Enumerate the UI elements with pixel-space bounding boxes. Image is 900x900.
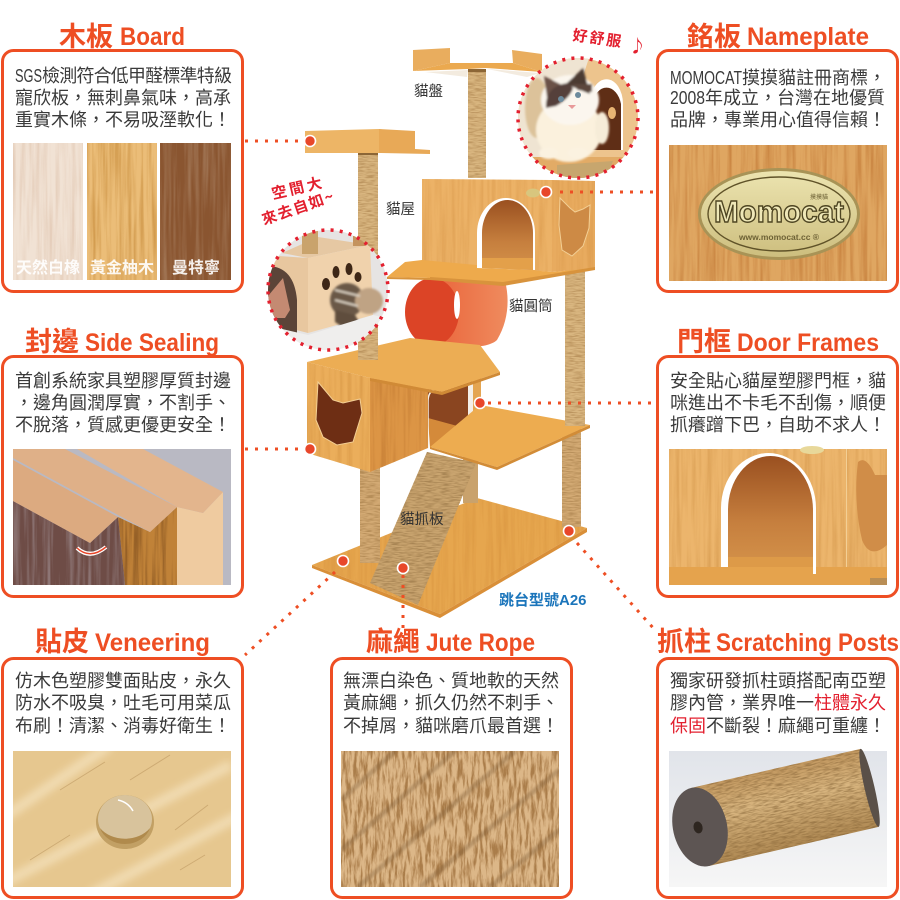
heading: 抓柱: [657, 627, 711, 657]
heading: Door Frames: [737, 329, 879, 357]
note: plenty of space: 空間大: [269, 171, 327, 204]
description: 仿木色塑膠雙面貼皮，永久: [15, 671, 231, 691]
right post upper: [565, 266, 585, 426]
description: MOMOCAT: [670, 68, 742, 88]
description: 重實木條，不易吸溼軟化！: [15, 110, 231, 130]
description: 抓癢蹭下巴，自助不求人！: [670, 415, 886, 435]
water drop photo: [13, 751, 231, 887]
description: 保固不斷裂！麻繩可重纏！: [670, 716, 886, 736]
description: ，邊角圓潤厚實，不割手、: [15, 393, 231, 413]
description: 摸摸貓註冊商標，: [742, 68, 886, 88]
description: [670, 671, 886, 736]
dotted leader lines: [245, 141, 655, 655]
description: [343, 671, 559, 736]
description: 品牌，專業用心值得信賴！: [670, 110, 886, 130]
door arch: [477, 198, 535, 270]
lower left post: [360, 465, 380, 563]
marker dots: [304, 136, 574, 574]
heading: 封邊: [25, 327, 79, 357]
edge sealing photo: [13, 449, 231, 585]
back post: [463, 440, 478, 503]
heading: Veneering: [95, 629, 210, 657]
panel: jute rope: [332, 626, 572, 898]
right post overlap on shelf: [565, 405, 585, 426]
description: 獨家研發抓柱頭搭配南亞塑: [670, 671, 886, 691]
swatches: [13, 143, 231, 280]
heading: [25, 327, 219, 357]
heading: Side Sealing: [85, 329, 219, 357]
heading: [687, 22, 869, 52]
photo circle: cat with paw house: [265, 225, 395, 355]
note: comfortable: 好舒服: [571, 24, 625, 52]
description: SGS: [15, 66, 42, 86]
door photo: [669, 446, 887, 585]
part labels: [386, 83, 552, 528]
description: 年成立，台灣在地優質: [705, 88, 885, 108]
description: 不掉屑，貓咪磨爪最首選！: [343, 716, 559, 736]
post photo: [665, 748, 887, 887]
top cat tray: [413, 48, 542, 77]
panel: scratching posts: [657, 627, 899, 898]
nameplate photo: [669, 145, 887, 281]
curved arrow: [77, 547, 106, 554]
swatches: 曼特寧: [172, 258, 220, 277]
swatches: 天然白橡: [16, 258, 80, 277]
panel: nameplate: [658, 22, 898, 292]
description: [670, 371, 886, 435]
note: comfortable: ♪: [629, 32, 646, 57]
roof: [307, 338, 500, 392]
heading: 麻繩: [366, 626, 420, 657]
platform: [387, 260, 595, 283]
heading: 銘板: [687, 22, 741, 52]
right post lower segment: [562, 428, 581, 527]
description: 不脫落，質感更優更安全！: [15, 414, 231, 435]
description: [15, 671, 231, 736]
heading: Board: [120, 23, 185, 51]
description: 2008: [670, 88, 705, 108]
swatches: 黃金柚木: [90, 258, 154, 277]
panel: side sealing: [2, 327, 242, 596]
second cat tray: [305, 129, 430, 155]
post between house and roof: [358, 270, 378, 360]
part labels: 貓盤: [414, 83, 443, 100]
description: [670, 68, 886, 130]
nameplate photo: www.momocat.cc ®: [738, 232, 820, 242]
model label: 跳台型號A26: [499, 591, 587, 609]
cat tree illustration: [305, 48, 595, 618]
heading: 門框: [677, 327, 731, 357]
heading: [35, 627, 210, 657]
heading: [366, 626, 535, 657]
water drop: [96, 795, 154, 849]
heading: 貼皮: [35, 627, 89, 657]
cat head hole: [559, 198, 590, 256]
cat head hole: [316, 382, 362, 445]
panel: veneering: [0, 627, 242, 898]
back post segment: [463, 333, 478, 347]
part labels: 貓圓筒: [509, 298, 552, 315]
description: 膠內管，業界唯一柱體永久: [670, 693, 886, 713]
base board: [312, 498, 587, 618]
small nameplate: [526, 188, 540, 198]
upper post: [468, 70, 486, 178]
heading: Jute Rope: [426, 629, 535, 657]
note: comfortable: [571, 24, 646, 57]
cat house: [387, 179, 595, 286]
description: [15, 66, 232, 130]
heading: Nameplate: [747, 23, 869, 51]
photo circle: cat in house: [516, 56, 640, 180]
rope photo: [341, 751, 559, 887]
part labels: 貓抓板: [400, 511, 444, 528]
panel: board: [2, 22, 242, 292]
note: plenty of space: 來去自如~: [259, 185, 338, 230]
orange tunnel: [405, 276, 508, 347]
part labels: 貓屋: [386, 201, 415, 218]
description: 檢測符合低甲醛標準特級: [42, 66, 232, 86]
description: 防水不吸臭，吐毛可用菜瓜: [15, 693, 231, 713]
left post: [358, 154, 378, 274]
description: 寵欣板，無刺鼻氣味，高承: [15, 88, 231, 108]
description: 無漂白染色、質地軟的天然: [343, 671, 559, 691]
nameplate photo: Momocat: [714, 194, 844, 229]
description: 布刷！清潔、消毒好衛生！: [15, 716, 231, 736]
shelf: [430, 405, 590, 470]
scratching ramp: [370, 452, 476, 605]
description: 首創系統家具塑膠厚質封邊: [15, 371, 231, 391]
heading: 木板: [59, 22, 113, 52]
lower house: [307, 338, 500, 472]
nameplate photo: 摸摸貓: [810, 193, 828, 201]
heading: [677, 327, 879, 357]
panel: door frames: [658, 327, 898, 596]
description: 咪進出不卡毛不刮傷，順便: [670, 393, 886, 413]
description: 黃麻繩，抓久仍然不刺手、: [343, 693, 559, 713]
description: [15, 371, 231, 435]
heading: [59, 22, 185, 52]
description: 安全貼心貓屋塑膠門框，貓: [670, 371, 886, 391]
